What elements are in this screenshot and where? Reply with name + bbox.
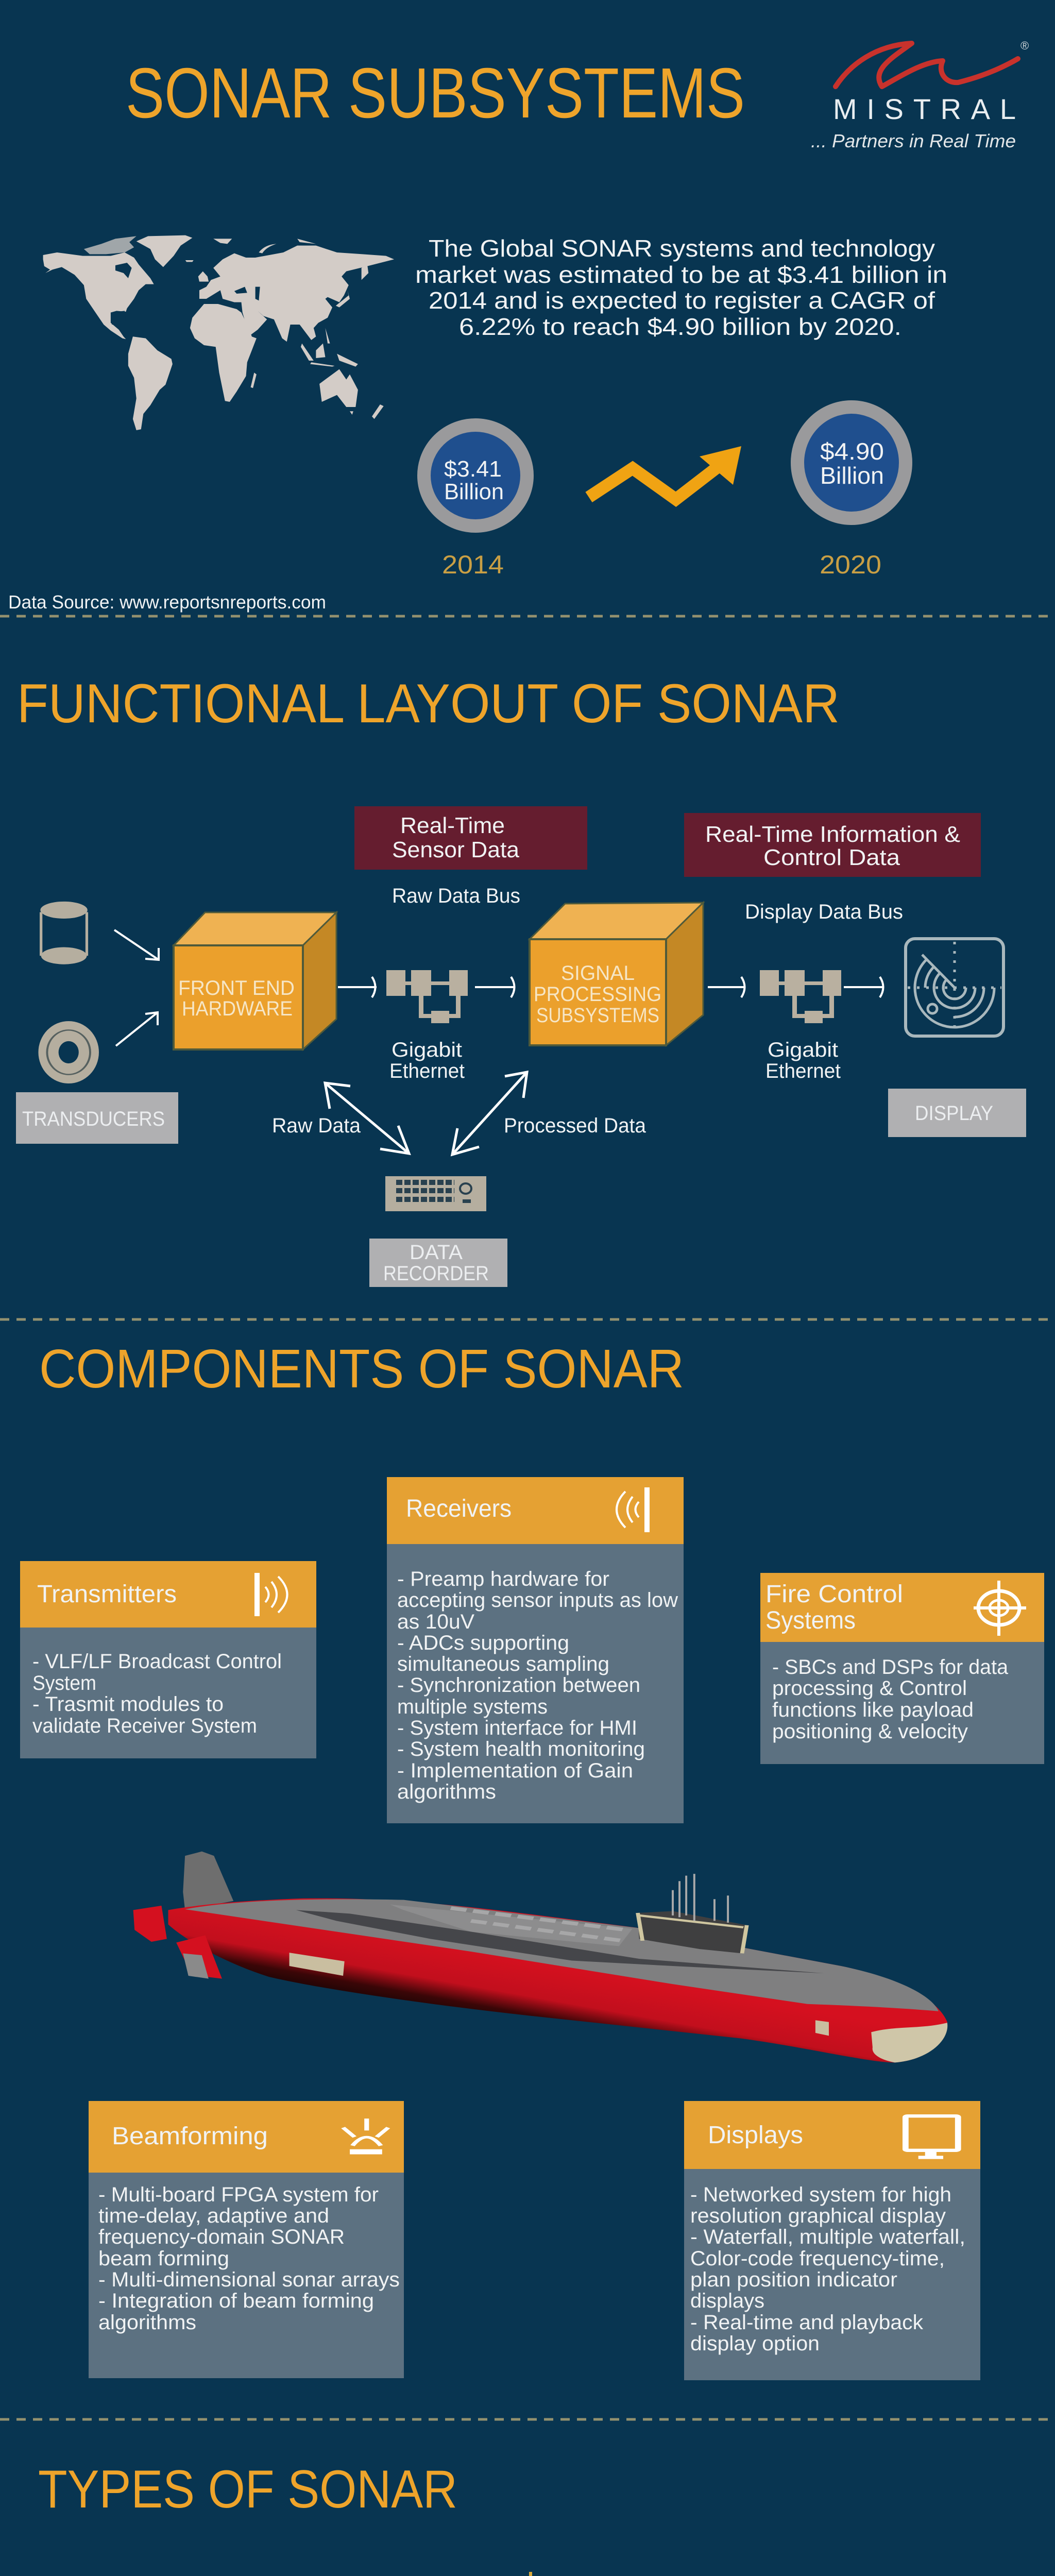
beamforming text: frequency-domain SONAR: [98, 2226, 345, 2248]
receivers text: - ADCs supporting: [397, 1632, 569, 1654]
panel: receivers: [387, 1477, 684, 1823]
block: signal processing subsystems: SIGNAL: [561, 962, 635, 985]
displays text: Color-code frequency-time,: [690, 2247, 945, 2270]
transmitters text: - VLF/LF Broadcast Control: [32, 1650, 282, 1673]
callout: real-time information and control data: Control Data: [763, 845, 900, 870]
receivers text: [397, 1568, 678, 1803]
heading: functional layout: FUNCTIONAL LAYOUT OF SONAR: [17, 672, 840, 734]
callout: real-time sensor data: [354, 806, 587, 870]
stat: 2014 value: Billion: [444, 479, 504, 504]
beamforming text: algorithms: [98, 2311, 196, 2334]
receivers text: - Implementation of Gain: [397, 1759, 633, 1782]
fire control text: processing & Control: [772, 1677, 967, 1700]
title: SONAR SUBSYSTEMS: [126, 54, 745, 133]
arrows: transducers to front end: [114, 930, 159, 1046]
displays text: displays: [690, 2290, 764, 2312]
receivers text: - System health monitoring: [397, 1738, 645, 1760]
heading: types: TYPES OF SONAR: [38, 2460, 457, 2519]
receivers text: - System interface for HMI: [397, 1717, 637, 1739]
label: gigabit ethernet 2: [765, 1039, 841, 1082]
icon: beamforming: [343, 2119, 388, 2155]
receivers text: - Synchronization between: [397, 1674, 640, 1697]
panel: transmitters: [20, 1561, 316, 1758]
receivers text: multiple systems: [397, 1696, 548, 1718]
receivers text: simultaneous sampling: [397, 1653, 609, 1675]
beamforming text: - Integration of beam forming: [98, 2290, 374, 2312]
fire control text: - SBCs and DSPs for data: [772, 1656, 1009, 1679]
stat: 2014 value: [424, 425, 527, 526]
label: processed data: Processed Data: [504, 1114, 646, 1137]
receivers text: as 10uV: [397, 1611, 474, 1633]
receivers text: algorithms: [397, 1781, 496, 1803]
transmitters text: System: [32, 1672, 96, 1694]
arrow: growth: [589, 446, 741, 499]
stat: 2020 value: Billion: [820, 462, 884, 489]
icon: monitor: [906, 2116, 958, 2159]
label: transducers: TRANSDUCERS: [22, 1108, 165, 1130]
panel: fire control systems: Fire Control: [765, 1581, 903, 1608]
market summary text: The Global SONAR systems and technology: [429, 235, 935, 262]
year label 2020: 2020: [820, 550, 881, 579]
block: signal processing subsystems: PROCESSING: [534, 983, 661, 1006]
receivers text: accepting sensor inputs as low: [397, 1589, 678, 1612]
callout: real-time information and control data: Real-Time Information &: [705, 822, 960, 847]
block: front end hardware: [174, 912, 336, 1049]
beamforming text: beam forming: [98, 2247, 229, 2270]
label: data recorder: [369, 1239, 507, 1287]
label: gigabit ethernet 1: [389, 1039, 465, 1082]
market summary text: 2014 and is expected to register a CAGR of: [429, 287, 935, 314]
beamforming text: time-delay, adaptive and: [98, 2205, 329, 2227]
icon: ring transducer: [38, 1021, 99, 1083]
label: display data bus: Display Data Bus: [745, 901, 903, 923]
panel: beamforming: Beamforming: [112, 2123, 268, 2150]
label: raw data bus: Raw Data Bus: [392, 885, 520, 907]
block: front end hardware: HARDWARE: [182, 997, 293, 1020]
logo: Mistral: ®: [1020, 39, 1029, 52]
icon: cylindrical transducer: [40, 902, 88, 964]
arrows: data flow: [338, 977, 883, 997]
year label 2014: 2014: [442, 550, 504, 579]
stat: 2020 value: [797, 407, 906, 518]
panel: fire control systems: [760, 1573, 1044, 1764]
data source: Data Source: www.reportsnreports.com: [8, 591, 326, 613]
block: front end hardware: FRONT END: [178, 977, 295, 999]
panel: fire control systems: Systems: [765, 1607, 856, 1634]
icon: transmitter: [254, 1573, 287, 1616]
icon: target: [974, 1581, 1026, 1636]
transmitters text: - Trasmit modules to: [32, 1693, 224, 1716]
label: gigabit ethernet 1: Gigabit: [392, 1039, 462, 1061]
panel: displays: [684, 2101, 980, 2380]
icon: radar display: [906, 939, 1003, 1036]
panel: receivers: Receivers: [406, 1495, 512, 1522]
callout: real-time sensor data: Sensor Data: [392, 837, 520, 862]
panel: transmitters: Transmitters: [37, 1581, 177, 1608]
label: display: [888, 1089, 1026, 1137]
callout: real-time information and control data: [684, 813, 981, 877]
fire control text: [772, 1656, 1009, 1743]
beamforming text: [98, 2183, 400, 2334]
label: transducers: [16, 1092, 178, 1144]
illustration: submarine: [133, 1852, 947, 2062]
double arrow: processed data: [452, 1072, 527, 1155]
label: raw data: Raw Data: [272, 1114, 361, 1137]
market summary text: 6.22% to reach $4.90 billion by 2020.: [459, 313, 901, 340]
logo: Mistral: MISTRAL: [833, 93, 1016, 125]
icon: gigabit ethernet switch 1: [386, 970, 468, 1023]
beamforming text: - Multi-board FPGA system for: [98, 2183, 379, 2206]
market summary text: market was estimated to be at $3.41 billion in: [415, 261, 947, 288]
heading: components: COMPONENTS OF SONAR: [39, 1338, 684, 1399]
displays text: resolution graphical display: [690, 2205, 946, 2227]
stat: 2020 value: $4.90: [820, 438, 884, 465]
logo: Mistral: [811, 39, 1029, 151]
displays text: - Real-time and playback: [690, 2311, 924, 2334]
label: gigabit ethernet 2: Ethernet: [765, 1060, 841, 1082]
displays text: - Networked system for high: [690, 2183, 951, 2206]
callout: real-time sensor data: Real-Time: [400, 813, 505, 838]
stat: 2014 value: $3.41: [444, 456, 502, 482]
transmitters text: validate Receiver System: [32, 1715, 257, 1737]
receivers text: - Preamp hardware for: [397, 1568, 609, 1590]
label: gigabit ethernet 1: Ethernet: [389, 1060, 465, 1082]
label: gigabit ethernet 2: Gigabit: [768, 1039, 838, 1061]
icon: data recorder: [385, 1176, 486, 1211]
icon: receiver: [617, 1487, 650, 1532]
icon: gigabit ethernet switch 2: [760, 970, 841, 1023]
label: data recorder: RECORDER: [383, 1262, 489, 1285]
displays text: plan position indicator: [690, 2268, 897, 2291]
displays text: - Waterfall, multiple waterfall,: [690, 2226, 965, 2248]
fire control text: positioning & velocity: [772, 1720, 968, 1743]
fire control text: functions like payload: [772, 1699, 974, 1721]
displays text: display option: [690, 2332, 820, 2355]
double arrow: raw data: [325, 1083, 409, 1154]
market summary text: [415, 235, 947, 340]
block: signal processing subsystems: [530, 903, 703, 1045]
beamforming text: - Multi-dimensional sonar arrays: [98, 2268, 400, 2291]
panel: displays: Displays: [708, 2122, 803, 2149]
transmitters text: [32, 1650, 282, 1737]
label: data recorder: DATA: [410, 1241, 463, 1264]
block: signal processing subsystems: SUBSYSTEMS: [536, 1004, 659, 1027]
label: display: DISPLAY: [915, 1102, 993, 1125]
logo: Mistral: ... Partners in Real Time: [811, 130, 1016, 151]
world map: [43, 235, 394, 430]
panel: beamforming: [89, 2101, 404, 2378]
displays text: [690, 2183, 965, 2355]
